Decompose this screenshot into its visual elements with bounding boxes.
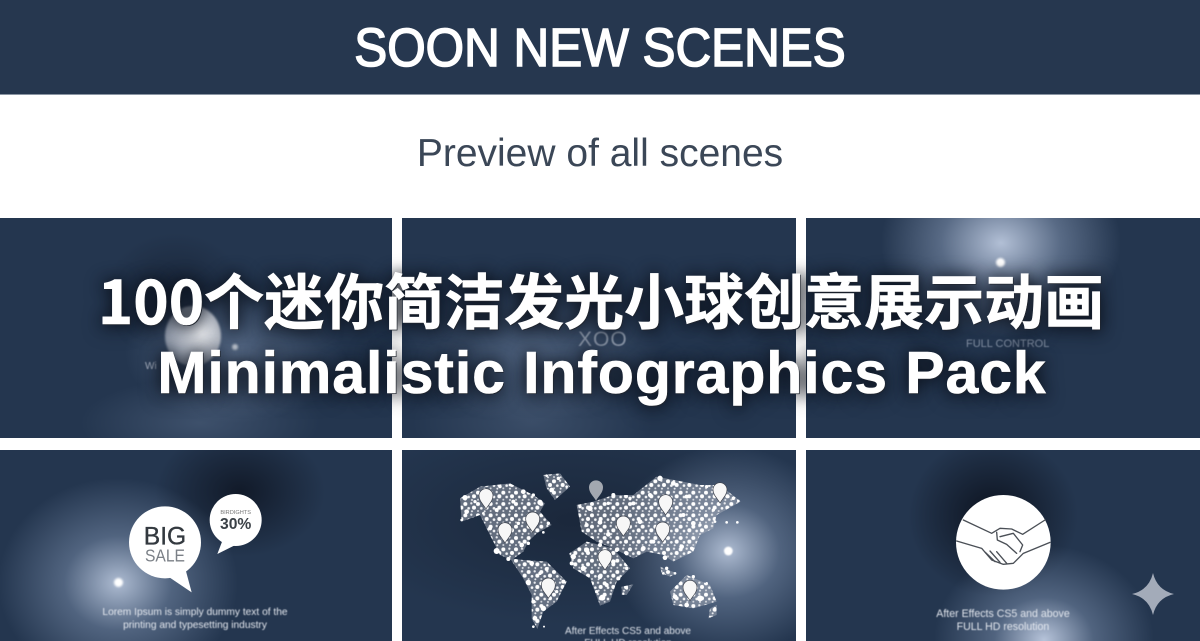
caption: after effects: FULL HD resolution: [957, 621, 1049, 633]
panel: world map scene: [402, 450, 796, 641]
handshake icon: [956, 495, 1051, 590]
main title overlay: [96, 255, 1110, 416]
header band: [0, 0, 1200, 95]
faded xoo symbols: XOO: [578, 328, 628, 351]
speech bubbles: [129, 494, 262, 592]
bubble: big sale: [129, 506, 201, 592]
glowing ball: [165, 306, 221, 366]
subtitle: preview of all scenes: Preview of all scenes: [417, 132, 783, 175]
header title: SOON NEW SCENES: [354, 18, 846, 78]
map pins: [479, 480, 727, 601]
dotted world map with pins: [460, 474, 740, 629]
caption: lorem ipsum: printing and typesetting industry: [123, 620, 267, 631]
caption: after effects: [936, 608, 1070, 633]
panel: top left scene: [0, 218, 392, 438]
caption: lorem ipsum: Lorem Ipsum is simply dummy text of the: [102, 607, 288, 618]
icon: sparkle star: [1132, 573, 1174, 615]
bubble: big sale: BIG: [144, 523, 186, 550]
bubble: 30 percent: 30%: [220, 516, 251, 533]
panel: top middle scene: [402, 218, 796, 438]
title line: chinese: 100个迷你简洁发光小球创意展示动画: [98, 255, 1104, 342]
caption: after effects: After Effects CS5 and above: [565, 626, 691, 637]
faded caption: Wi: [145, 361, 157, 372]
glowing dot: [114, 578, 123, 587]
panel: top right scene: [806, 218, 1200, 438]
dotted continents: [460, 474, 740, 629]
glowing dot: [724, 547, 733, 555]
panel: big sale scene: [0, 450, 392, 641]
small light dot: [232, 344, 238, 350]
glowing dot: [996, 258, 1005, 267]
bubble: 30 percent: BIRDIGHTS: [220, 510, 252, 516]
panel: handshake scene: [806, 450, 1200, 641]
bubble: 30 percent: [210, 494, 262, 554]
caption: lorem ipsum: [102, 606, 288, 631]
faded caption: full control: FULL CONTROL: [966, 338, 1049, 350]
title line: english: Minimalistic Infographics Pack: [157, 340, 1047, 406]
bubble: big sale: SALE: [145, 546, 185, 566]
caption: after effects: After Effects CS5 and above: [936, 608, 1070, 620]
